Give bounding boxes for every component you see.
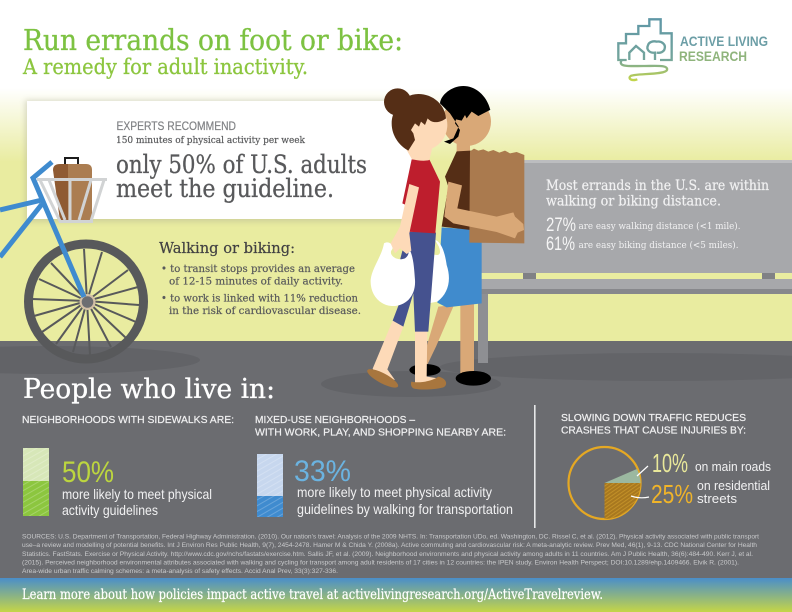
icon: bicycle with basket bbox=[0, 158, 144, 359]
logo: Active Living Research bbox=[618, 19, 768, 80]
card shadow bbox=[25, 100, 417, 222]
sources bbox=[22, 534, 759, 575]
title: Run errands on foot or bike: bbox=[23, 23, 403, 57]
mixed-use line 2: guidelines by walking for transportation bbox=[297, 501, 513, 517]
logo icon: city skyline bbox=[618, 19, 672, 80]
sidewalks line 2: activity guidelines bbox=[62, 502, 158, 518]
stat 27%: 27% bbox=[546, 215, 576, 236]
headline line 2: meet the guideline. bbox=[116, 174, 334, 203]
panel: slowing traffic bbox=[561, 412, 771, 519]
sources: Area-wide urban traffic calming schemes: a meta-analysis of safety effects. Accid Anal Prev, 33(3):327-336. bbox=[22, 568, 338, 575]
footer call to action: Learn more about how policies impact active travel at activelivingresearch.org/ActiveTravelreview. bbox=[22, 587, 603, 603]
panel: sidewalks bbox=[22, 414, 234, 518]
panel: mixed-use bbox=[255, 414, 513, 517]
heading: people who live in: People who live in: bbox=[23, 374, 275, 405]
label: experts recommend: EXPERTS RECOMMEND bbox=[116, 121, 236, 133]
pie chart bbox=[568, 447, 649, 519]
sources: SOURCES: U.S. Department of Transportation, Federal Highway Administration. (2010). Our nation's travel: Analysis of the 2009 NHTS. In: Transportation UDo, ed. Washington, DC. Rissel C, et al. (2012). Physical activity associated with public transport bbox=[22, 534, 759, 541]
stat: 10%: 10% bbox=[652, 448, 688, 478]
bullet 1 line 1: • to transit stops provides an average bbox=[161, 263, 355, 275]
stat 27% label: are easy walking distance (<1 mile). bbox=[578, 221, 741, 232]
sources: Statistics. FastStats. Exercise or Physical Activity. http://www.cdc.gov/nchs/fastats/exercise.htm. Sallis JF, et al. (2009). Neighborhood environments and physical activity among adults in 11 countries. Am J Public Health, 36(6):484-490. Kerr J, et al. bbox=[22, 551, 753, 558]
logo wordmark line 1: ACTIVE LIVING bbox=[680, 34, 768, 49]
bench bbox=[478, 160, 792, 363]
bullet 2 line 1: • to work is linked with 11% reduction bbox=[161, 292, 358, 304]
stat 61%: 61% bbox=[546, 234, 575, 255]
sources: (2015). Perceived neighborhood environmental attributes associated with walking and cycling for transport among adult residents of 17 cities in 12 countries: the IPEN study. Environ Health Perspect; DOI:10.1289/ehp.1409466. Elvik R. (2001). bbox=[22, 559, 739, 566]
subtitle: A remedy for adult inactivity. bbox=[22, 55, 308, 79]
mixed-use heading line 1: MIXED-USE NEIGHBORHOODS – bbox=[255, 414, 415, 426]
sidewalks heading: NEIGHBORHOODS WITH SIDEWALKS ARE: bbox=[22, 414, 234, 426]
traffic heading line 1: SLOWING DOWN TRAFFIC REDUCES bbox=[561, 412, 746, 424]
headline line 1: only 50% of U.S. adults bbox=[116, 150, 367, 179]
man bbox=[409, 86, 524, 386]
woman bbox=[365, 88, 447, 391]
frame bbox=[0, 162, 84, 297]
sidewalks line 1: more likely to meet physical bbox=[62, 486, 212, 502]
bag bbox=[53, 164, 68, 221]
mixed-use heading line 2: WITH WORK, PLAY, AND SHOPPING NEARBY ARE: bbox=[255, 426, 506, 438]
bullet 2 line 2: in the risk of cardiovascular disease. bbox=[169, 305, 361, 317]
logo wordmark line 2: RESEARCH bbox=[679, 49, 747, 64]
residential label line 2: streets bbox=[697, 491, 738, 506]
hub bbox=[80, 294, 96, 310]
bench heading line 1: Most errands in the U.S. are within bbox=[546, 178, 769, 194]
bag handle bbox=[65, 158, 78, 164]
stat: 50%: 50% bbox=[62, 456, 114, 489]
main roads label: on main roads bbox=[695, 459, 771, 474]
heading: Walking or biking: bbox=[159, 239, 295, 257]
sources: use–a review and modelling of potential benefits. Int J Environ Res Public Health, 9(7), 2454-2478. Hamer M & Chida Y. (2008a). Active commuting and cardiovascular risk: A meta-analytic review. Prev Med, 46(1), 9-13. CDC National Center for Health bbox=[22, 542, 757, 549]
bullet 1 line 2: of 12-15 minutes of daily activity. bbox=[169, 276, 343, 288]
traffic heading line 2: CRASHES THAT CAUSE INJURIES BY: bbox=[561, 424, 746, 436]
front plastic bag bbox=[371, 242, 415, 306]
illustration: couple carrying groceries bbox=[365, 86, 524, 391]
mixed-use line 1: more likely to meet physical activity bbox=[297, 484, 492, 500]
text: 150 minutes: 150 minutes of physical activity per week bbox=[116, 135, 305, 146]
bar: 33% bbox=[257, 454, 283, 517]
residential label line 1: on residential bbox=[697, 478, 770, 493]
bench heading line 2: walking or biking distance. bbox=[546, 194, 721, 210]
stat: 25%: 25% bbox=[651, 479, 693, 509]
back plastic bag bbox=[428, 240, 449, 303]
ground bbox=[0, 341, 792, 579]
panel: experts recommend bbox=[27, 101, 417, 219]
text block: walking or biking bbox=[159, 239, 361, 317]
basket bbox=[37, 180, 107, 222]
footer banner bbox=[0, 578, 792, 612]
wheel bbox=[28, 244, 144, 359]
background sky and lawn bbox=[0, 0, 792, 342]
stat: 33%: 33% bbox=[294, 455, 351, 488]
stat 61% label: are easy biking distance (<5 miles). bbox=[578, 240, 739, 251]
bar: 50% bbox=[23, 448, 49, 516]
